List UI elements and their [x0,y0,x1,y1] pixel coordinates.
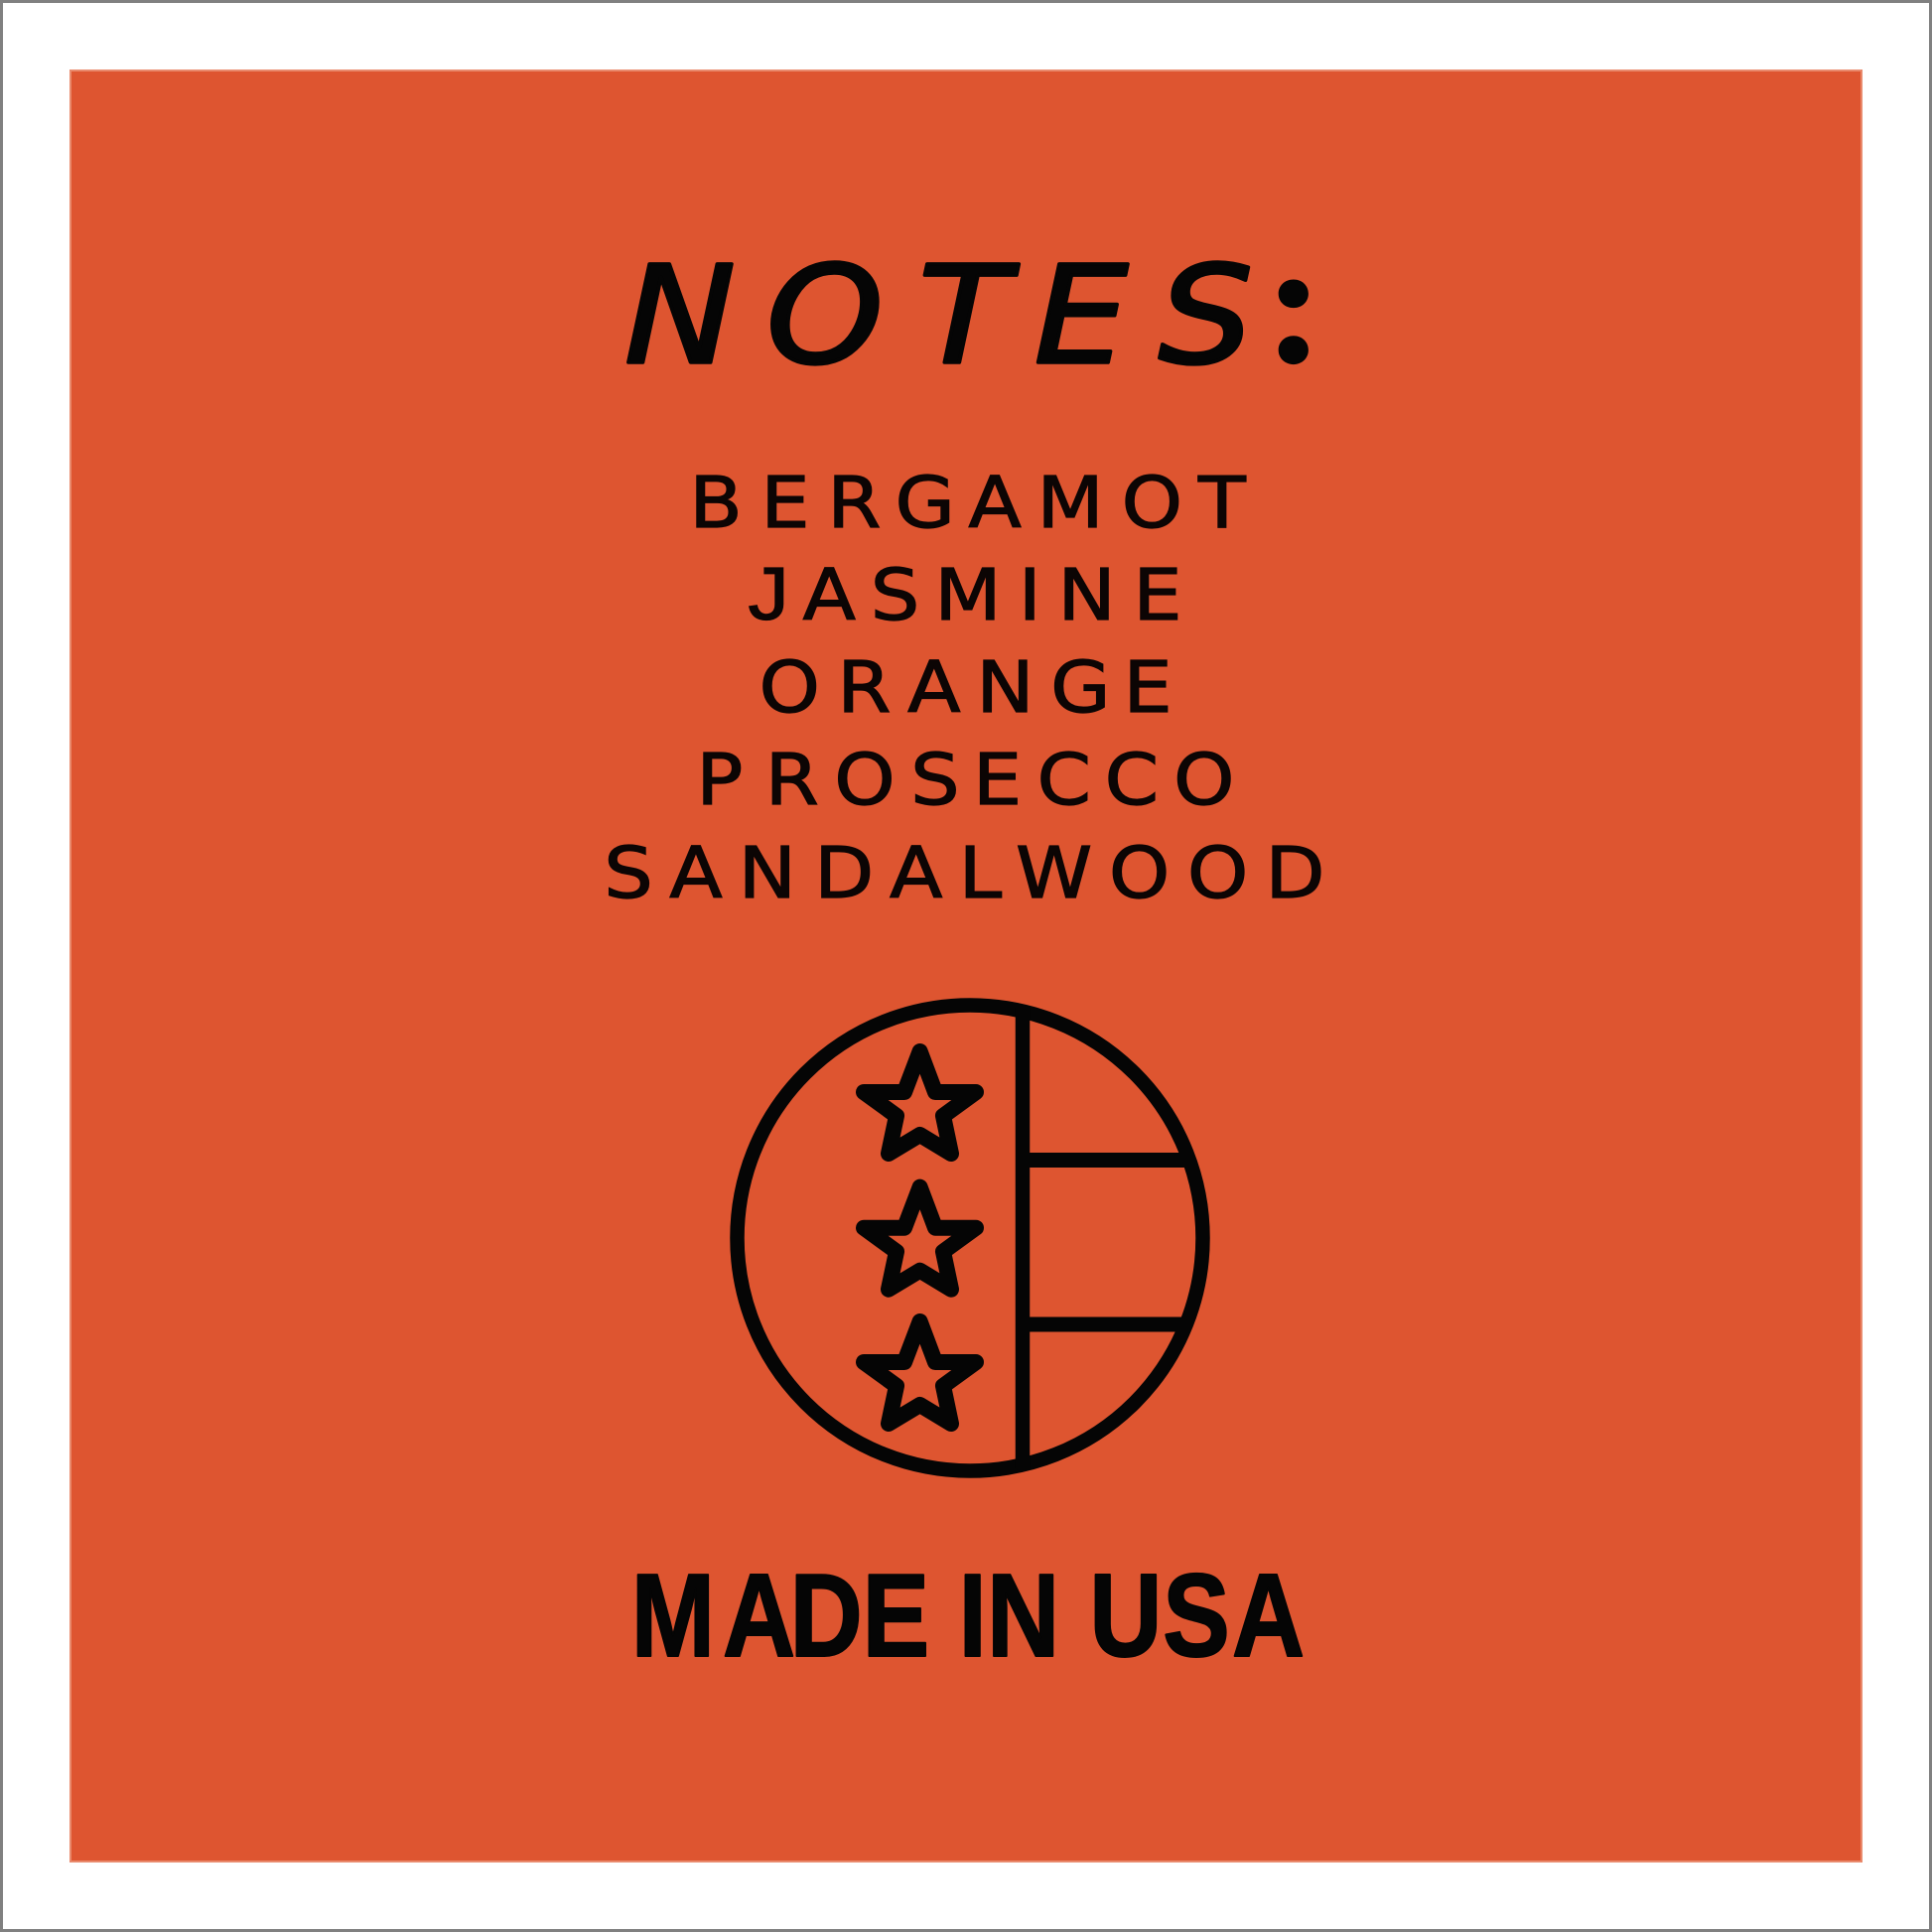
note: jasmine: ASMINE [803,554,1182,636]
label: made in usa: MADEINUSA [631,1550,1305,1682]
flag lower stripe line [1023,1316,1189,1332]
note: prosecco: PROSECCO [696,739,1235,821]
flag circle outline [737,1005,1203,1471]
heading: notes: : [1267,191,1320,406]
note: orange: ORANGE [759,646,1173,729]
note: jasmine: J [749,552,789,635]
note: sandalwood: SANDALWOOD [604,832,1324,914]
flag upper stripe line [1023,1153,1189,1168]
flag vertical divider [1016,1008,1030,1468]
star: bottom [864,1321,976,1424]
heading: notes: NOTES [624,236,1253,394]
text block: list of notes [604,462,1324,914]
note: bergamot: BERGAMOT [689,462,1246,544]
star: middle [864,1187,976,1290]
star: top [864,1051,976,1154]
icon: circular american flag [737,1005,1203,1471]
